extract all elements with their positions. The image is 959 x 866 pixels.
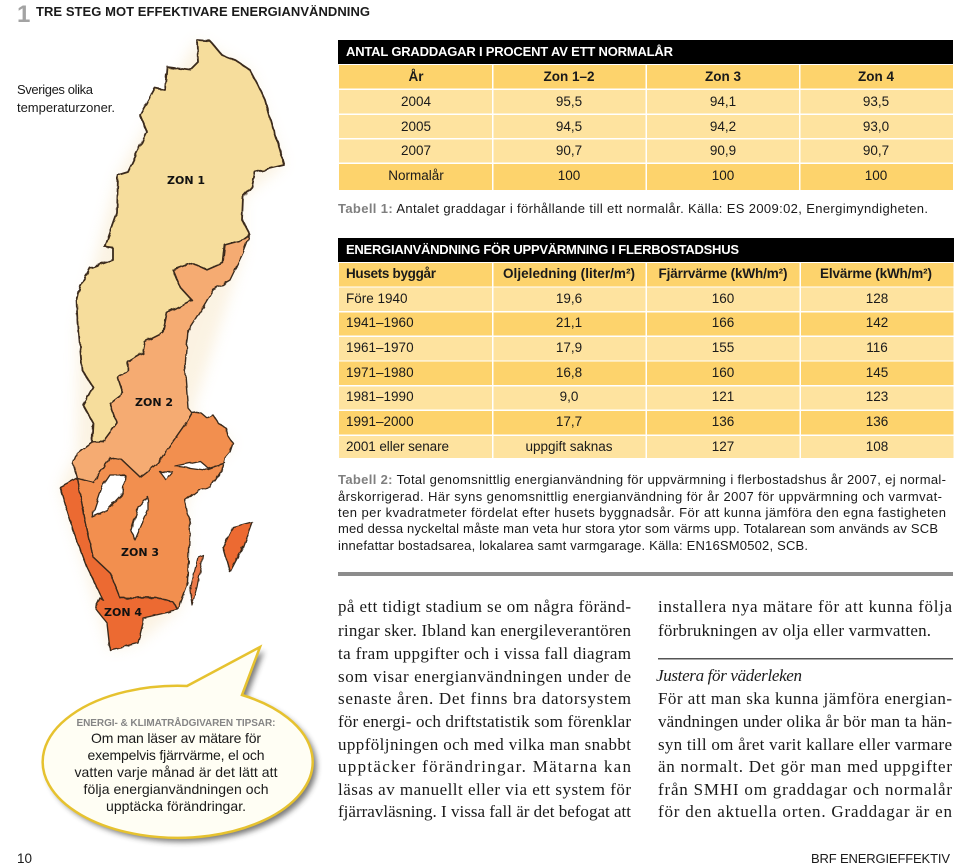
table 1 values: 100 (558, 168, 580, 183)
table 1 values: Normalår (388, 168, 444, 183)
table 2 values: uppgift saknas (525, 439, 613, 454)
table 2 values: Fjärrvärme (kWh/m²) (658, 266, 788, 281)
body text column 1: ta fram uppgifter och i vissa fall diagram (338, 644, 631, 663)
table 2 caption (338, 472, 946, 553)
body text column 1: på ett tidigt stadium se om några föränd- (338, 597, 631, 616)
table 2 values: Husets byggår (346, 266, 437, 281)
body text column 2: syn till om året varit kallare eller varmare (658, 735, 952, 754)
table 2 values: 128 (866, 291, 888, 306)
table 1: degree days (338, 40, 953, 190)
callout: speech bubble with tip (43, 647, 317, 842)
map caption: temperaturzoner. (17, 100, 115, 115)
section title: 1 (17, 1, 30, 28)
map: Swedish temperature zones (60, 40, 284, 650)
body text column 2: för den aktuella orten. Graddagar är en (658, 802, 952, 821)
table 2 heading (338, 238, 954, 262)
callout text: exempelvis fjärrvärme, el och (88, 747, 264, 763)
zone labels: ZON 2 (135, 396, 173, 409)
table 1 values: Zon 4 (858, 69, 894, 84)
table 2 values: 17,7 (556, 414, 582, 429)
body text column 2: Justera för väderleken (656, 666, 802, 685)
page number: 10 (17, 851, 32, 866)
table 2 values: 1961–1970 (346, 340, 414, 355)
table 2 values: 155 (712, 340, 734, 355)
body text column 2: vändningen under olika år bör man ta hän- (658, 712, 952, 731)
table 2 values: 108 (866, 439, 888, 454)
zone labels: ZON 1 (167, 174, 205, 187)
table 2 values: 17,9 (556, 340, 582, 355)
table 1 values: 90,7 (556, 143, 582, 158)
map: lakes (92, 461, 225, 540)
table 2 values: Elvärme (kWh/m²) (820, 266, 932, 281)
table 2 values: 1941–1960 (346, 315, 414, 330)
map: Gotland (223, 522, 252, 572)
section title: TRE STEG MOT EFFEKTIVARE ENERGIANVÄNDNING (36, 4, 370, 19)
table 2 values: 136 (712, 414, 734, 429)
table 2 caption: ten per kvadratmeter fördelat efter husets byggnadsår. För att kunna jämföra den egna fastigheten (338, 505, 946, 520)
map: zone 2 (73, 235, 250, 482)
table 2 values: 142 (866, 315, 888, 330)
body text column 1: senaste åren. Det finns bra datorsystem (338, 689, 631, 708)
table 2 values: 1991–2000 (346, 414, 414, 429)
table 1 values: 2004 (401, 94, 432, 109)
table 1 values (388, 69, 894, 183)
body text column 1 (338, 597, 632, 821)
callout heading: ENERGI- & KLIMATRÅDGIVAREN TIPSAR: (76, 716, 276, 729)
table 2 caption: med dessa nyckeltal måste man veta hur stora ytor som värms upp. Totalarean som används av SCB (338, 521, 938, 536)
table 2 values: 16,8 (556, 365, 582, 380)
callout text (74, 730, 278, 814)
table 1 values: 2007 (401, 143, 431, 158)
table 2 caption: innefattar bostadsarea, lokalarea samt varmgarage. Källa: EN16SM0502, SCB. (338, 538, 808, 553)
table 1 values: 94,2 (710, 119, 736, 134)
table 2 caption: årskorrigerad. Här syns genomsnittlig energianvändning för år 2007 för uppvärmning och varmvat- (338, 489, 942, 504)
map: zone 3 (77, 412, 233, 610)
body text column 1: för energi- och driftstatistik som förenklar (338, 712, 631, 731)
table 1 values: 100 (712, 168, 734, 183)
table 2 values: 1981–1990 (346, 389, 414, 404)
table 2 values: Oljeledning (liter/m²) (503, 266, 635, 281)
table 2 values: 19,6 (556, 291, 582, 306)
table 2 values: 121 (712, 389, 734, 404)
callout text: följa energianvändningen och (84, 781, 268, 797)
map: Öland (190, 555, 203, 605)
body text column 2: än normalt. Det gör man med uppgifter (658, 757, 952, 776)
table 1 values: 90,9 (710, 143, 736, 158)
body text column 2: från SMHI om graddagar och normalår (658, 780, 952, 799)
table 1 caption: Tabell 1: Antalet graddagar i förhållande till ett normalår. Källa: ES 2009:02, Energimyndigheten. (338, 201, 928, 216)
callout text: vatten varje månad är det lätt att (74, 764, 278, 780)
table 2 values: 116 (866, 340, 888, 355)
table 2 values: 1971–1980 (346, 365, 414, 380)
table 1 values: 93,0 (863, 119, 889, 134)
table 2 heading: ENERGIANVÄNDNING FÖR UPPVÄRMNING I FLERBOSTADSHUS (346, 242, 739, 257)
body text column 1: uppföljningen och med vilka man snabbt (338, 735, 631, 754)
table 2 values: 160 (712, 365, 734, 380)
body text column 2: För att man ska kunna jämföra energian- (658, 689, 952, 708)
table 1 values: 100 (865, 168, 887, 183)
table 2 values: Före 1940 (346, 291, 408, 306)
map: zone 1 (77, 40, 284, 442)
table 2 values (346, 266, 932, 454)
zone labels: ZON 4 (104, 606, 142, 619)
body text column 2: installera nya mätare för att kunna följa (658, 597, 952, 616)
table 1 values: 2005 (401, 119, 431, 134)
table 2 values: 2001 eller senare (346, 439, 449, 454)
table 2 caption: Tabell 2: Total genomsnittlig energianvändning för uppvärmning i flerbostadshus år 2007, ej normal- (338, 472, 946, 487)
callout text: Om man läser av mätare för (91, 730, 261, 746)
body text column 2 (656, 597, 953, 821)
table 2 values: 127 (712, 439, 734, 454)
table 2 values: 123 (866, 389, 888, 404)
body text column 1: ringar sker. Ibland kan energileverantören (338, 621, 632, 640)
table 2 values: 9,0 (560, 389, 578, 404)
table 1 heading (338, 40, 953, 64)
body text column 1: upptäcker förändringar. Mätarna kan (338, 757, 632, 776)
zone labels: ZON 3 (121, 546, 159, 559)
table 1 values: Zon 1–2 (543, 69, 595, 84)
publication name: BRF ENERGIEFFEKTIV (811, 851, 950, 866)
table 1 values: 94,1 (710, 94, 736, 109)
table 2: energy use (338, 238, 954, 458)
table 2 values: 21,1 (556, 315, 582, 330)
table 1 values: Zon 3 (705, 69, 741, 84)
table 1 values: 90,7 (863, 143, 889, 158)
table 1 values: 94,5 (556, 119, 582, 134)
callout text: upptäcka förändringar. (106, 798, 246, 814)
table 1 values: 95,5 (556, 94, 582, 109)
table 1 values: År (408, 69, 424, 84)
table 2 values: 145 (866, 365, 888, 380)
table 2 values: 136 (866, 414, 888, 429)
table 2 cells (339, 263, 954, 458)
map: zone 4 (60, 478, 178, 650)
section title (17, 1, 370, 28)
body text column 1: fjärravläsning. I vissa fall är det befogat att (338, 802, 631, 821)
body text column 1: läsas av manuellt eller via ett system för (338, 780, 631, 799)
map caption (17, 82, 115, 115)
body text column 1: som visar energianvändningen under de (338, 667, 631, 686)
map caption: Sveriges olika (17, 82, 94, 97)
table 1 values: 93,5 (863, 94, 889, 109)
body text column 2: förbrukningen av olja eller varmvatten. (658, 621, 931, 640)
table 2 values: 160 (712, 291, 734, 306)
zone labels (104, 174, 205, 619)
table 2 values: 166 (712, 315, 734, 330)
table 1 heading: ANTAL GRADDAGAR I PROCENT AV ETT NORMALÅR (346, 44, 674, 59)
table 1 cells (339, 65, 953, 190)
